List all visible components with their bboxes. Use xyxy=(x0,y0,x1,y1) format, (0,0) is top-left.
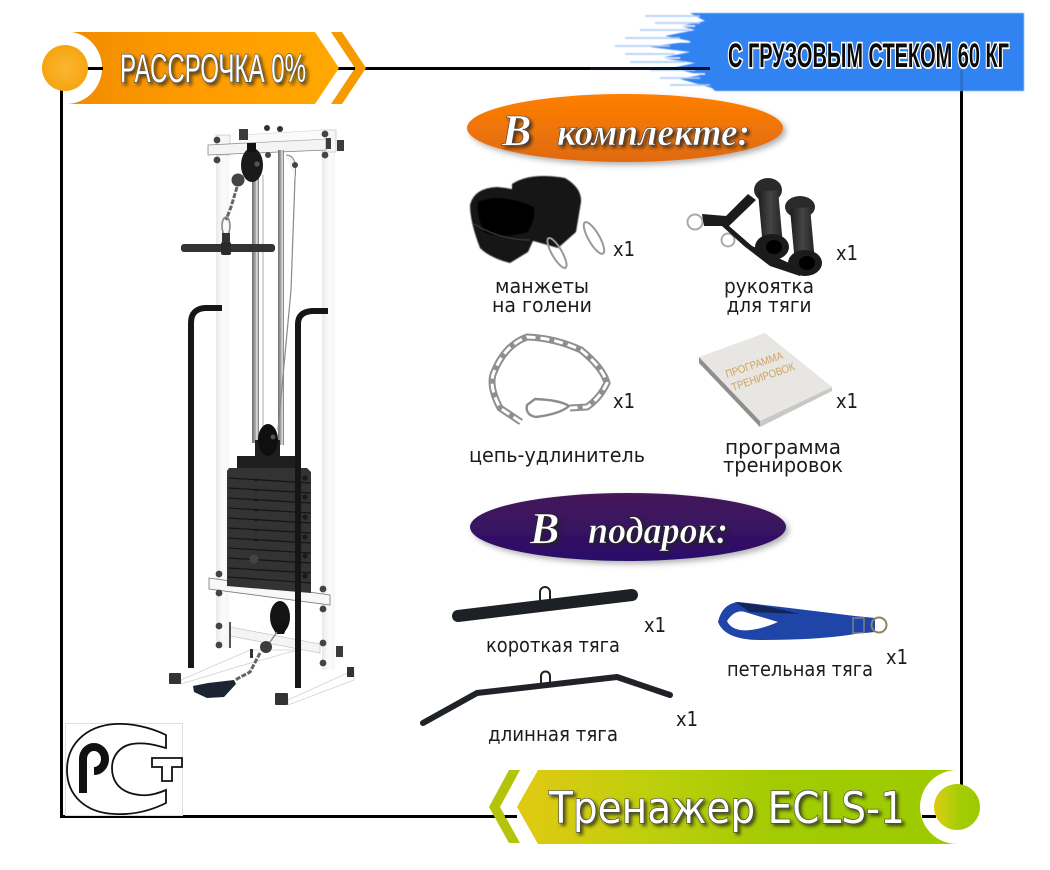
heading: as a gift xyxy=(470,493,786,561)
item: training program book xyxy=(699,333,832,427)
heading: in the kit xyxy=(467,94,783,162)
label: ankle cuffs: x1 xyxy=(613,237,635,261)
banner: installment plan: РАССРОЧКА 0% xyxy=(120,47,306,91)
label: double pull handle: для тяги xyxy=(726,293,812,317)
label: loop strap: петельная тяга xyxy=(727,657,873,681)
banner: product name xyxy=(489,770,980,844)
item: training program book: ПРОГРАММА xyxy=(724,350,785,381)
item: long bar xyxy=(423,672,670,723)
label: loop strap: x1 xyxy=(886,645,908,669)
label: long bar xyxy=(488,707,698,746)
label: short bar: x1 xyxy=(644,613,666,637)
banner: weight stack xyxy=(590,13,1024,91)
icon: green circle xyxy=(934,784,980,830)
icon: orange circle xyxy=(42,45,88,91)
label: training program book xyxy=(723,389,858,477)
label: extension chain: цепь-удлинитель xyxy=(469,443,645,467)
label: loop strap xyxy=(727,645,908,681)
page frame xyxy=(60,67,963,818)
label: short bar xyxy=(486,613,666,657)
item: short bar xyxy=(458,587,632,616)
item: loop strap xyxy=(718,602,886,640)
item: double pull handle xyxy=(688,178,822,276)
label: double pull handle xyxy=(724,241,858,317)
heading: as a gift: В xyxy=(529,504,559,553)
label: training program book: тренировок xyxy=(723,453,843,477)
label: extension chain: x1 xyxy=(613,389,635,413)
label: training program book: x1 xyxy=(836,389,858,413)
heading: in the kit: комплекте: xyxy=(557,112,750,154)
label: training program book: программа xyxy=(725,435,841,459)
label: long bar: x1 xyxy=(676,707,698,731)
label: double pull handle: рукоятка xyxy=(724,274,814,298)
side handrails xyxy=(191,308,328,688)
item: extension chain xyxy=(492,337,607,422)
certification mark xyxy=(66,724,182,816)
item: training program book: ТРЕНИРОВОК xyxy=(730,361,797,394)
weight stack xyxy=(227,424,311,593)
label: ankle cuffs xyxy=(492,237,635,317)
heading: in the kit: В xyxy=(501,106,531,155)
item: ankle cuffs xyxy=(470,176,608,270)
label: double pull handle: x1 xyxy=(836,241,858,265)
label: long bar: длинная тяга xyxy=(488,722,618,746)
label: short bar: короткая тяга xyxy=(486,633,620,657)
top pulley, chain and T-handle xyxy=(181,143,275,255)
guide rods and cables xyxy=(252,150,298,445)
banner: installment plan xyxy=(42,32,366,104)
label: extension chain xyxy=(469,389,645,467)
label: ankle cuffs: на голени xyxy=(492,293,592,317)
lower pulley, chain and strap handle xyxy=(193,601,290,698)
banner: product name: Тренажер ECLS-1 xyxy=(548,783,905,834)
heading: as a gift: подарок: xyxy=(588,510,728,552)
machine frame xyxy=(169,125,354,705)
label: ankle cuffs: манжеты xyxy=(495,274,589,298)
exercise machine xyxy=(169,125,354,705)
